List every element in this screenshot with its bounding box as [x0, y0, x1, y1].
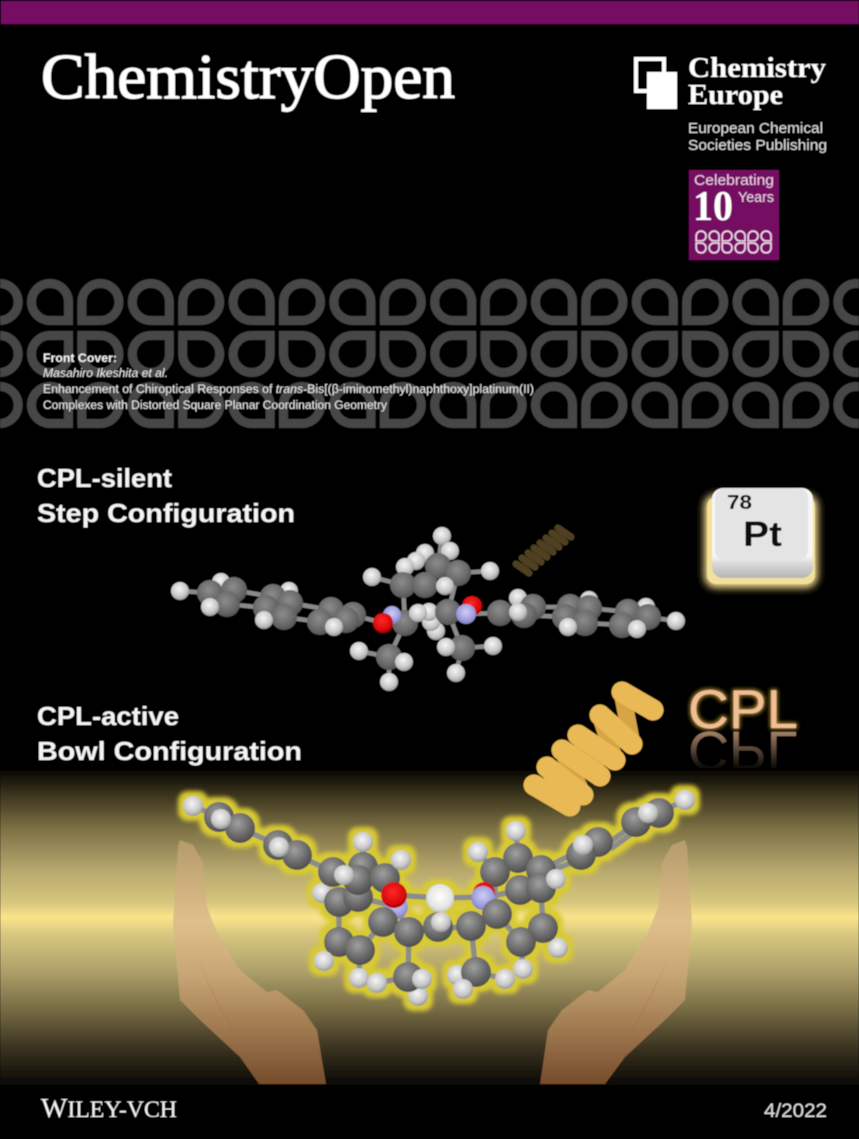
badge: Celebrating 10 Years: 10	[693, 184, 733, 230]
publisher name: Societies Publishing	[688, 137, 827, 154]
heading: CPL-silent Step Configuration	[37, 463, 295, 528]
logo wordmark: Chemistry	[688, 53, 826, 84]
bonds	[180, 536, 676, 682]
decorative band: teardrop pattern	[0, 279, 859, 429]
badge: Celebrating 10 Years: Celebrating	[694, 172, 774, 189]
front cover article text: Front Cover:	[43, 353, 117, 365]
publisher: Wiley-VCH: WILEY-VCH	[41, 1093, 177, 1123]
heading: CPL-silent Step Configuration: Step Configuration	[37, 498, 295, 528]
label: CPL with reflection: CPL	[688, 678, 798, 740]
heading: CPL-active Bowl Configuration	[37, 701, 302, 766]
icon: Pt element key: Pt	[743, 515, 782, 554]
top magenta bar	[1, 1, 859, 24]
badge: Celebrating 10 Years	[689, 170, 779, 260]
heading: CPL-active Bowl Configuration: Bowl Configuration	[37, 736, 302, 766]
front cover article text: Enhancement of Chiroptical Responses of trans-Bis[(β-iminomethyl)naphthoxy]platinum(II)	[43, 384, 534, 396]
publisher name: European Chemical	[688, 120, 823, 137]
title: ChemistryOpen: ChemistryOpen	[41, 41, 455, 112]
atoms	[183, 790, 695, 1006]
gold light band	[0, 770, 859, 1085]
label: CPL with reflection	[688, 678, 798, 782]
icon: Pt element key: 78	[727, 492, 752, 514]
badge: Celebrating 10 Years: Years	[738, 190, 774, 206]
icon: right hand	[540, 840, 692, 1084]
icon: left hand	[173, 840, 326, 1084]
molecule: step configuration	[171, 527, 685, 691]
atoms	[171, 527, 685, 691]
front cover article text: Masahiro Ikeshita et al.	[43, 368, 168, 380]
logo wordmark: Europe	[688, 80, 783, 111]
Chemistry Europe logo	[636, 53, 827, 154]
label: CPL with reflection: CPL	[688, 720, 798, 782]
icon: overlapping squares	[636, 59, 677, 109]
bonds	[193, 800, 685, 983]
front cover article text	[43, 353, 534, 412]
heading: CPL-silent Step Configuration: CPL-silent	[37, 463, 172, 493]
icon: Pt element key	[704, 488, 818, 588]
front cover article text: Complexes with Distorted Square Planar Coordination Geometry	[43, 400, 387, 412]
icon: large CPL spiral	[534, 692, 653, 806]
issue number: 4/2022	[764, 1100, 827, 1122]
heading: CPL-active Bowl Configuration: CPL-active	[37, 701, 179, 731]
molecule: bowl configuration with yellow halo	[183, 790, 695, 1006]
icon: small dim spiral	[516, 528, 571, 573]
